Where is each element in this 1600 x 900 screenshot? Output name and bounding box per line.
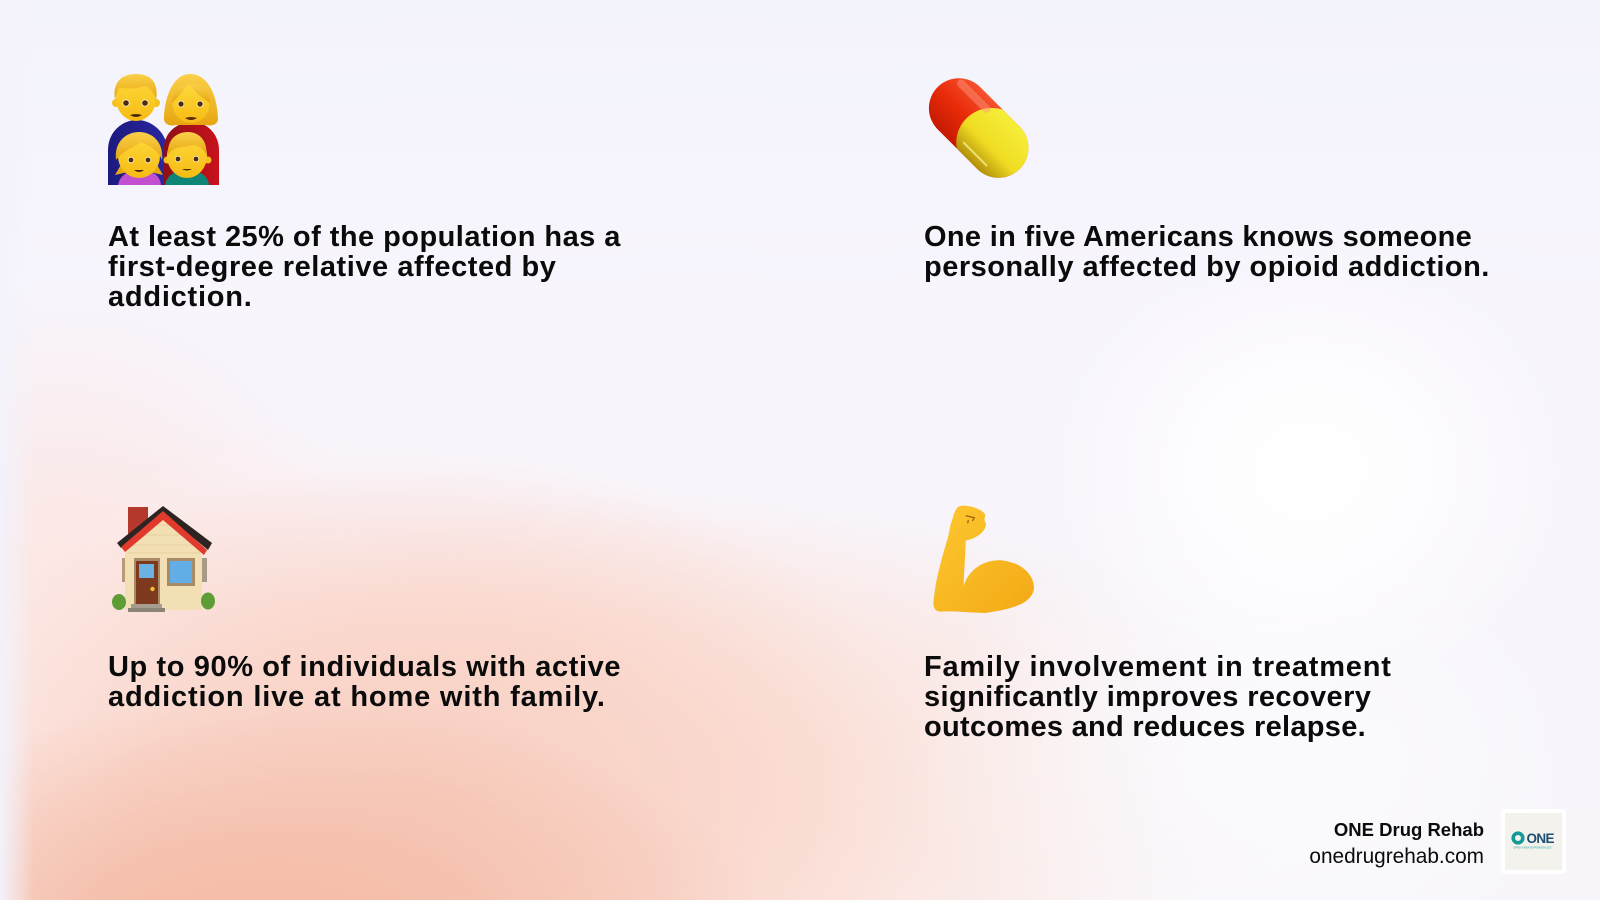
- stat text: population relative: first-degree relative affected by: [108, 251, 556, 283]
- brand url: onedrugrehab.com: [1309, 845, 1484, 868]
- stat text: opioid: personally affected by opioid addiction.: [924, 251, 1490, 283]
- logo: ONE: [1526, 831, 1555, 846]
- stat text: family involvement: Family involvement in treatment: [924, 651, 1392, 683]
- stat text: family involvement: significantly improves recovery: [924, 681, 1371, 713]
- stat text: population relative: [108, 221, 621, 313]
- stat text: opioid: [924, 221, 1490, 283]
- stat text: population relative: At least 25% of the population has a: [108, 221, 621, 253]
- brand name: ONE Drug Rehab: [1334, 819, 1484, 840]
- stat text: live at home: addiction live at home with family.: [108, 681, 606, 713]
- stat text: family involvement: [924, 651, 1392, 743]
- stat text: live at home: [108, 651, 621, 713]
- stat text: population relative: addiction.: [108, 281, 253, 313]
- stat text: live at home: Up to 90% of individuals with active: [108, 651, 621, 683]
- stat text: opioid: One in five Americans knows someone: [924, 221, 1472, 253]
- logo: OPEN NEW EXPERIENCES: [1513, 846, 1552, 850]
- stat text: family involvement: outcomes and reduces relapse.: [924, 711, 1366, 743]
